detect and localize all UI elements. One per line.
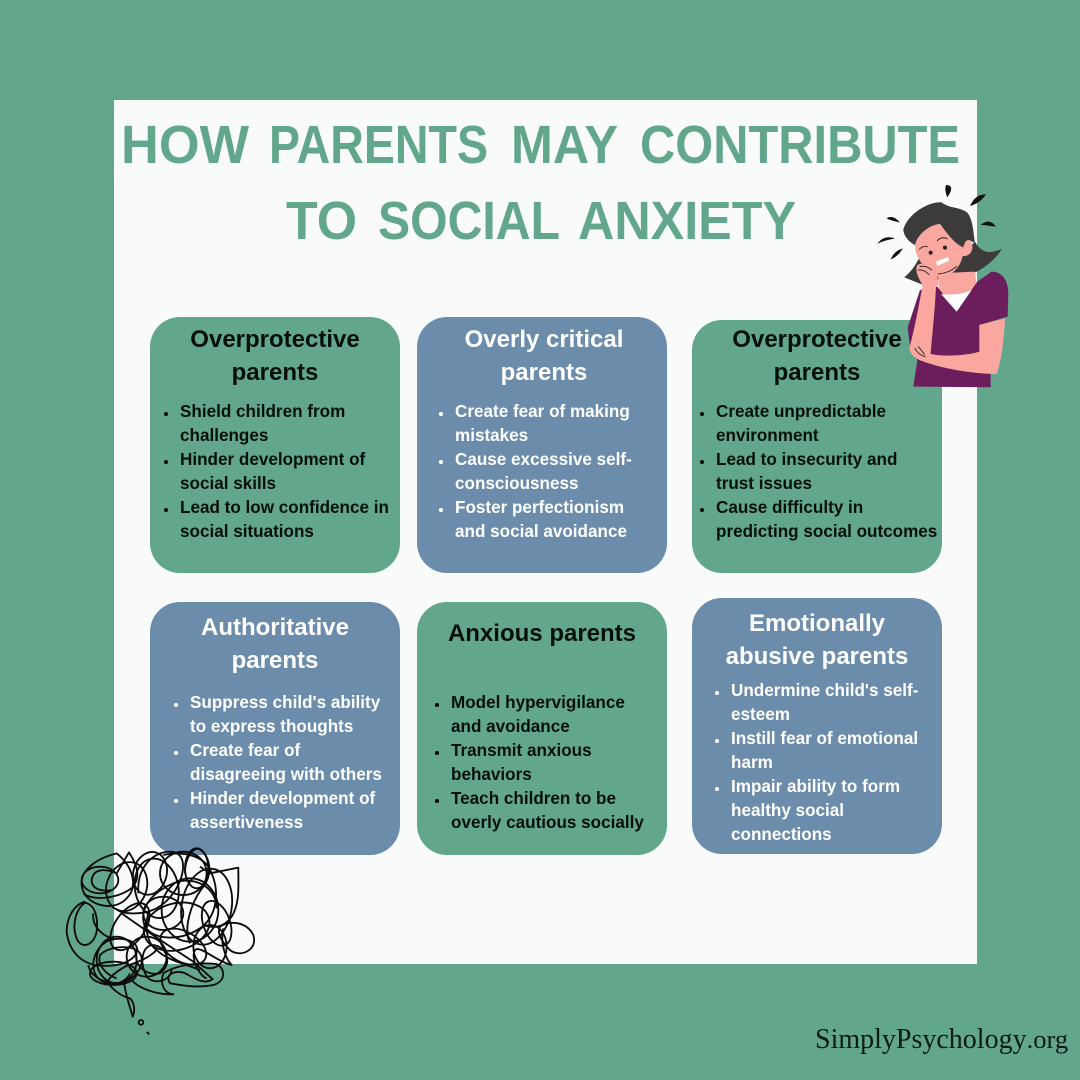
bullet list: trust issues: [716, 474, 812, 493]
bullet list: and avoidance: [451, 717, 570, 736]
bullet list: [164, 402, 389, 541]
bullet list: harm: [731, 753, 773, 772]
bullet list: Hinder development of: [180, 450, 365, 469]
bullet list: challenges: [180, 426, 268, 445]
title: ANXIETY: [578, 191, 796, 251]
title: HOW: [121, 115, 249, 175]
bullet list: Create unpredictable: [716, 402, 886, 421]
bullet list: Suppress child's ability: [190, 693, 380, 712]
panel: overprotective parents (left): [150, 317, 400, 573]
bullet list: Teach children to be: [451, 789, 616, 808]
bullet list: Lead to low confidence in: [180, 498, 389, 517]
bullet list: Hinder development of: [190, 789, 375, 808]
bullet list: [700, 402, 937, 541]
title: PARENTS: [269, 115, 488, 175]
bullet list: predicting social outcomes: [716, 522, 937, 541]
bullet list: overly cautious socially: [451, 813, 644, 832]
panel: emotionally abusive parents: [692, 598, 942, 854]
heading: [190, 326, 360, 386]
bullet list: connections: [731, 825, 832, 844]
bullet list: Create fear of: [190, 741, 300, 760]
title: CONTRIBUTE: [640, 115, 960, 175]
heading: parents: [232, 359, 318, 386]
heading: parents: [501, 359, 587, 386]
title: MAY: [511, 115, 618, 175]
heading: Overly critical: [465, 326, 623, 353]
bullet list: [439, 402, 632, 541]
bullet list: [715, 681, 918, 844]
bullet list: assertiveness: [190, 813, 303, 832]
bullet list: Lead to insecurity and: [716, 450, 897, 469]
title: TO: [286, 191, 357, 251]
heading: Overprotective: [190, 326, 360, 353]
heading: parents: [774, 359, 860, 386]
bullet list: consciousness: [455, 474, 579, 493]
heading: Authoritative: [201, 614, 349, 641]
bullet list: and social avoidance: [455, 522, 627, 541]
bullet list: healthy social: [731, 801, 844, 820]
heading: [726, 610, 908, 670]
bullet list: Transmit anxious: [451, 741, 592, 760]
bullet list: environment: [716, 426, 819, 445]
bullet list: esteem: [731, 705, 790, 724]
bullet list: Foster perfectionism: [455, 498, 624, 517]
bullet list: [174, 693, 382, 832]
bullet list: Cause excessive self-: [455, 450, 632, 469]
bullet list: behaviors: [451, 765, 532, 784]
bullet list: [435, 693, 644, 832]
bullet list: Undermine child's self-: [731, 681, 918, 700]
heading: Emotionally: [749, 610, 885, 637]
bullet list: Create fear of making: [455, 402, 630, 421]
panel: authoritative parents: [150, 602, 400, 855]
title: [121, 115, 960, 251]
bullet list: Model hypervigilance: [451, 693, 625, 712]
bullet list: Instill fear of emotional: [731, 729, 918, 748]
heading: abusive parents: [726, 643, 908, 670]
bullet list: social situations: [180, 522, 314, 541]
panel: overly critical parents: [417, 317, 667, 573]
bullet list: Impair ability to form: [731, 777, 900, 796]
bullet list: mistakes: [455, 426, 528, 445]
bullet list: disagreeing with others: [190, 765, 382, 784]
heading: Overprotective: [732, 326, 902, 353]
panel: overprotective parents (right): [692, 320, 942, 573]
bullet list: social skills: [180, 474, 276, 493]
heading: [465, 326, 623, 386]
bullet list: Shield children from: [180, 402, 345, 421]
title: SOCIAL: [378, 191, 560, 251]
background panel: [114, 100, 977, 964]
heading: parents: [232, 647, 318, 674]
panel: anxious parents: [417, 602, 667, 855]
heading: Anxious parents: [448, 620, 636, 647]
heading: [201, 614, 349, 674]
source credit: SimplyPsychology.org: [815, 1024, 1068, 1055]
bullet list: to express thoughts: [190, 717, 353, 736]
heading: [732, 326, 902, 386]
bullet list: Cause difficulty in: [716, 498, 863, 517]
